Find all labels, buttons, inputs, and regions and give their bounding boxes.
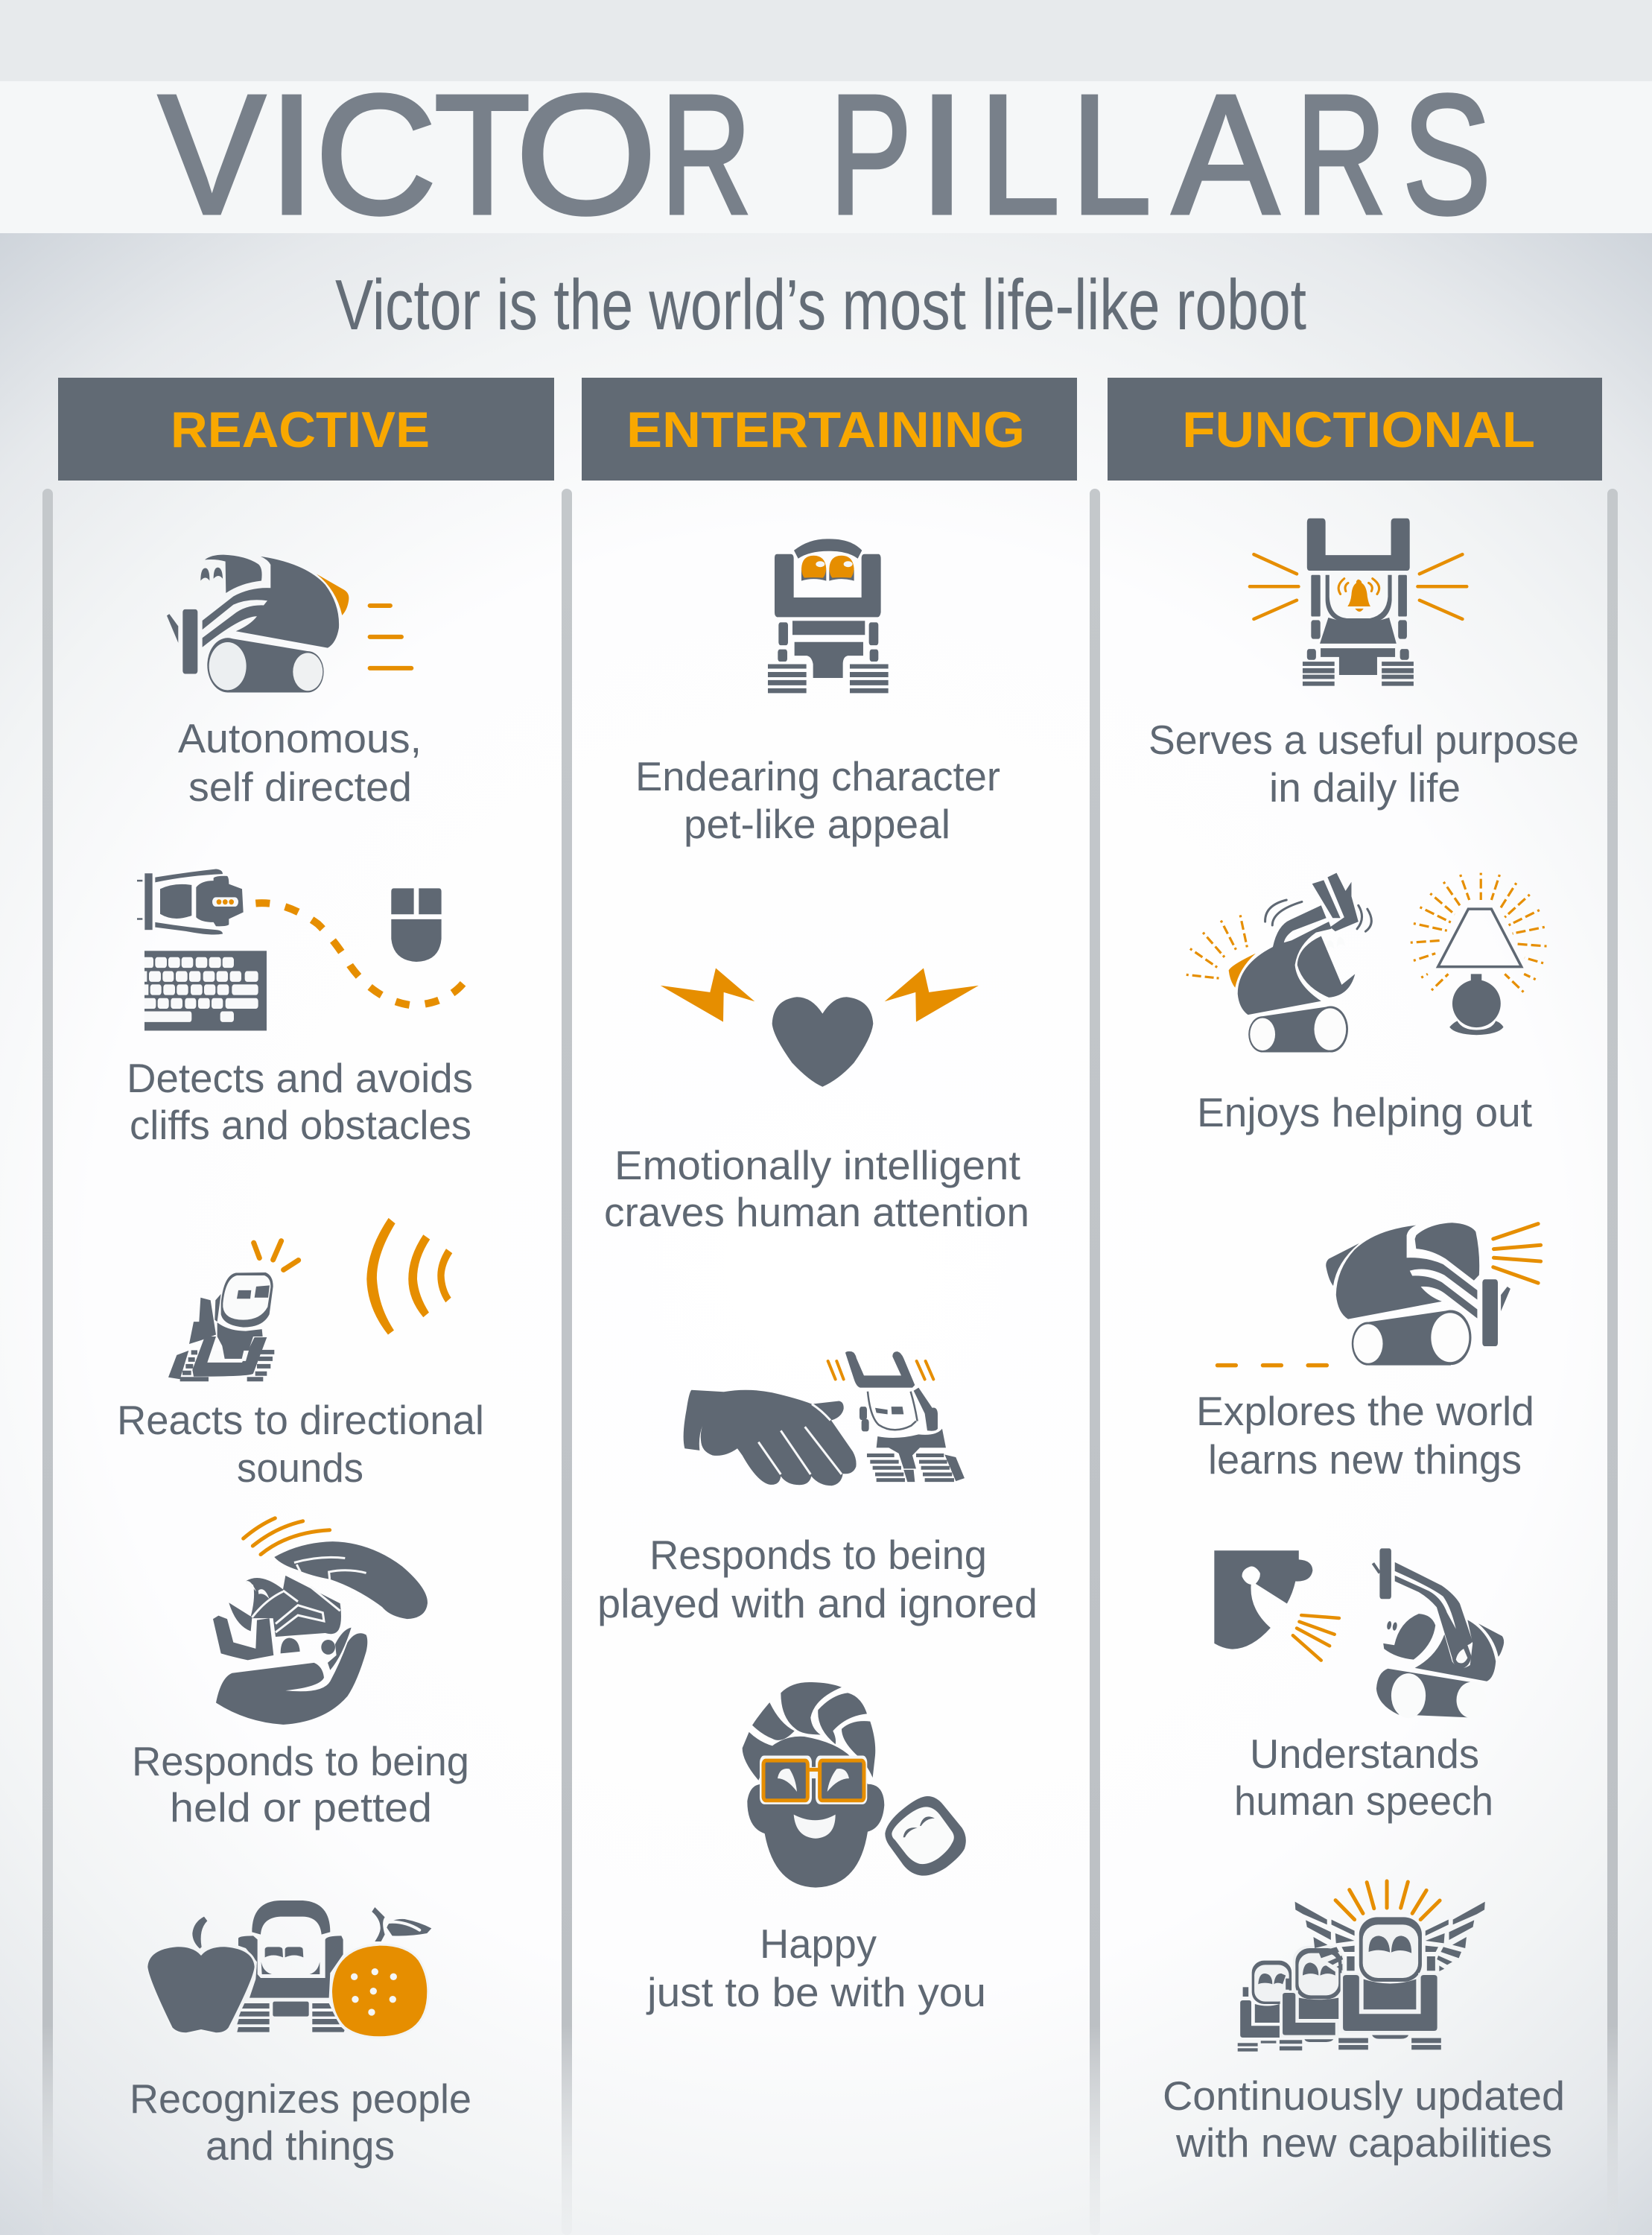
- text: happy: [646, 1921, 986, 2015]
- title: O: [515, 60, 657, 250]
- text: serves: in daily life: [1269, 764, 1461, 811]
- text: continuously: [1163, 2073, 1565, 2166]
- icon: apple robot orange: [147, 1900, 431, 2036]
- header: functional: [1108, 378, 1602, 481]
- text: serves: [1149, 717, 1579, 811]
- text: recognizes: and things: [206, 2123, 395, 2169]
- icon: robot and lamp: [1186, 873, 1547, 1053]
- icon: speech face and robot: [1214, 1548, 1504, 1718]
- title band: [0, 60, 1652, 250]
- text: reacts: Reacts to directional: [117, 1397, 484, 1443]
- text: responds played: Responds to being: [649, 1532, 987, 1578]
- icon: endearing robot: [768, 539, 889, 693]
- text: responds played: played with and ignored: [597, 1580, 1038, 1626]
- text: recognizes: Recognizes people: [130, 2076, 471, 2122]
- title: I: [918, 60, 965, 250]
- icon: cliffs and obstacles: [137, 869, 464, 1030]
- text: reacts: [117, 1397, 484, 1491]
- icon: hand and robot: [684, 1351, 965, 1486]
- keyboard: [144, 951, 267, 1030]
- text: detects: [127, 1055, 473, 1148]
- small robot: [1238, 1961, 1292, 2052]
- text: endearing: Endearing character: [635, 753, 1000, 799]
- icon: exploring robot: [1217, 1223, 1541, 1366]
- text: explores: [1196, 1388, 1534, 1483]
- text: explores: Explores the world: [1196, 1388, 1534, 1434]
- mouse: [391, 888, 442, 962]
- title: L: [979, 60, 1060, 250]
- text: continuously: Continuously updated: [1163, 2073, 1565, 2119]
- text: detects: Detects and avoids: [127, 1055, 473, 1101]
- text: emotionally: Emotionally intelligent: [614, 1142, 1020, 1188]
- text: serves: Serves a useful purpose: [1149, 717, 1579, 763]
- header: functional: FUNCTIONAL: [1182, 402, 1535, 458]
- middle robot: [1280, 1946, 1344, 2050]
- text: autonomous: Autonomous,: [178, 715, 422, 761]
- title: C: [315, 60, 436, 250]
- column pillars: [42, 489, 1618, 2235]
- text: responds held: [132, 1738, 469, 1830]
- icon: upgrading robots: [1238, 1881, 1485, 2052]
- header: reactive: REACTIVE: [171, 402, 430, 458]
- text: understands: [1234, 1731, 1493, 1824]
- text: happy: just to be with you: [646, 1969, 986, 2015]
- header: entertaining: [582, 378, 1077, 481]
- icon: autonomous robot: [167, 555, 411, 692]
- text: recognizes: [130, 2076, 471, 2169]
- text: responds held: Responds to being: [132, 1738, 469, 1784]
- subtitle: Victor is the world’s most life-like robot: [335, 265, 1306, 345]
- text: understands: Understands: [1250, 1731, 1479, 1777]
- icon: alarm robot: [1250, 519, 1467, 686]
- title: V: [159, 60, 265, 250]
- title: L: [1071, 60, 1151, 250]
- title: R: [1296, 60, 1386, 250]
- icon: heart and bolts: [661, 968, 979, 1087]
- text: endearing: pet-like appeal: [684, 801, 950, 847]
- text: happy: Happy: [760, 1921, 877, 1967]
- header: entertaining: ENTERTAINING: [626, 402, 1025, 458]
- text: emotionally: craves human attention: [604, 1189, 1029, 1235]
- text: detects: cliffs and obstacles: [130, 1102, 471, 1148]
- text: reacts: sounds: [237, 1445, 363, 1491]
- large robot: [1338, 1917, 1441, 2049]
- title: R: [661, 60, 752, 250]
- title: A: [1172, 60, 1279, 250]
- text: autonomous: self directed: [188, 764, 412, 810]
- text: autonomous: [178, 715, 422, 810]
- text: endearing: [635, 753, 1000, 847]
- title: S: [1402, 60, 1491, 250]
- text: responds played: [597, 1532, 1038, 1626]
- text: understands: human speech: [1234, 1778, 1493, 1824]
- title: I: [268, 60, 315, 250]
- text: explores: learns new things: [1208, 1436, 1522, 1483]
- icon: happy face with robot: [743, 1682, 966, 1888]
- text: enjoys: Enjoys helping out: [1197, 1089, 1532, 1135]
- text: responds held: held or petted: [170, 1784, 432, 1830]
- wings: [1295, 1902, 1485, 1971]
- text: emotionally: [604, 1142, 1029, 1235]
- icon: directional sounds: [168, 1218, 452, 1379]
- text: continuously: with new capabilities: [1175, 2120, 1552, 2166]
- icon: held or petted: [213, 1518, 428, 1725]
- title: T: [434, 60, 530, 250]
- header: reactive: [58, 378, 554, 481]
- title: P: [830, 60, 912, 250]
